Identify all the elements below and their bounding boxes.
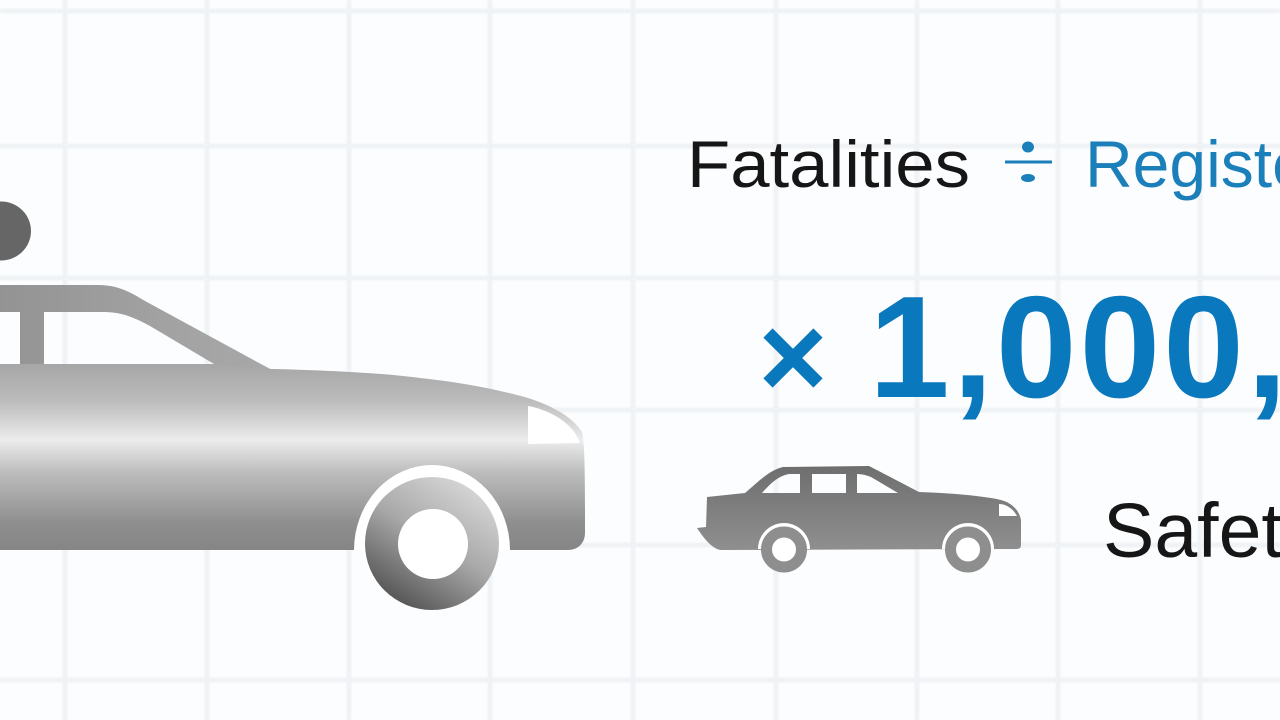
safety rating row: [697, 466, 1280, 574]
small car headlight: [999, 504, 1017, 516]
icon: division sign: [1005, 142, 1052, 182]
formula line: fatalities divided by registered: [687, 127, 1280, 201]
large car illustration: [0, 202, 585, 610]
multiplier: times 1,000,000: [768, 266, 1280, 428]
icon: small car: [697, 466, 1021, 567]
icon: grey circle above car: [0, 202, 31, 260]
icon: multiply sign: [768, 333, 818, 383]
small car rear wheel: [758, 523, 810, 567]
label: Fatalities: Fatalities: [687, 127, 970, 201]
car roof with window openings: [0, 285, 272, 370]
wheel hub: [398, 509, 468, 579]
car body: [0, 364, 585, 550]
wheel arch: [354, 465, 510, 550]
small car front wheel: [942, 523, 994, 567]
headlight: [528, 406, 580, 444]
small car body with window openings: [697, 466, 1021, 550]
front tyre: [365, 477, 499, 610]
